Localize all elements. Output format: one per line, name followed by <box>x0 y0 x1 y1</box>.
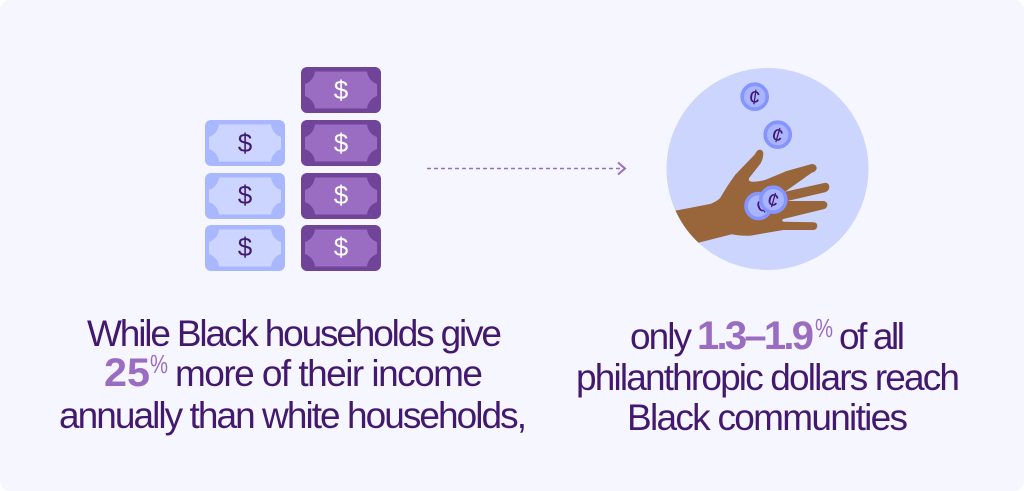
text line: While Black households give <box>87 313 502 354</box>
coin: ¢ <box>769 123 786 148</box>
coin <box>761 187 786 213</box>
text line: only <box>630 316 692 357</box>
highlighted stat: 25% <box>104 349 168 395</box>
bill <box>205 173 285 219</box>
bill <box>205 225 285 271</box>
bill <box>301 120 381 166</box>
bill <box>301 173 381 219</box>
bill: $ <box>238 128 253 158</box>
left statement <box>59 313 527 436</box>
circle backdrop <box>666 68 868 270</box>
icon: stack of light bills <box>205 120 285 271</box>
right statement <box>576 313 960 438</box>
icon: hand catching coins <box>660 68 868 270</box>
text line: of all <box>839 316 905 357</box>
coin <box>742 84 767 110</box>
bill: $ <box>238 232 253 262</box>
highlighted stat: 25%: 25 <box>104 351 150 395</box>
highlighted stat: 1.3–1.9%: % <box>815 313 833 343</box>
text line: philanthropic dollars reach <box>576 357 960 398</box>
icon: stack of dark bills <box>301 67 381 271</box>
bill: $ <box>238 180 253 210</box>
bill <box>301 225 381 271</box>
bill: $ <box>334 75 349 105</box>
bill <box>205 120 285 166</box>
text line: more of their income <box>175 353 483 394</box>
highlighted stat: 25%: % <box>150 349 168 379</box>
coin: ¢ <box>753 193 772 219</box>
bill <box>301 67 381 113</box>
bill: $ <box>334 128 349 158</box>
coin <box>765 122 790 148</box>
text line: annually than white households, <box>59 395 527 436</box>
hand <box>676 150 830 243</box>
text line: Black communities <box>627 397 908 438</box>
coin: ¢ <box>747 85 762 110</box>
coin: ¢ <box>764 188 782 213</box>
bill: $ <box>334 180 349 210</box>
highlighted stat: 1.3–1.9%: 1.3–1.9 <box>697 314 814 358</box>
arrow <box>427 162 625 174</box>
bill: $ <box>334 232 349 262</box>
